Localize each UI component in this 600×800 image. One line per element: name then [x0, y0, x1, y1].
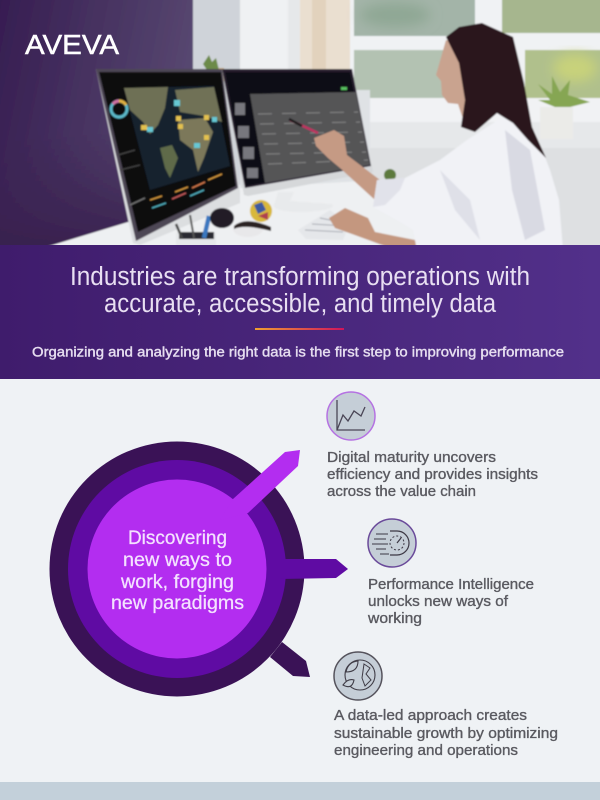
- photo: left monitor with world map: [96, 69, 240, 245]
- title banner: [0, 245, 600, 379]
- item 2 text: Performance Intelligence: [368, 577, 534, 593]
- photo: potted plant on sill: [538, 77, 590, 122]
- item 2 text: unlocks new ways of: [368, 594, 509, 610]
- main heading: Industries are transforming operations with: [70, 263, 530, 291]
- centre circle text: [111, 527, 244, 614]
- photo: purple wall: [0, 0, 194, 250]
- inner circle and upper arrow: [88, 450, 300, 658]
- subheading: Organizing and analyzing the right data is the first step to improving performance: [32, 344, 564, 360]
- item 1 text: across the value chain: [327, 484, 476, 500]
- item 1 text: Digital maturity uncovers: [327, 450, 496, 466]
- centre circle text: Discovering: [128, 527, 227, 549]
- item 3: data-led approach: [334, 652, 558, 759]
- photo: donut chart on screen: [111, 101, 127, 117]
- logo: AVEVA: AVEVA: [25, 29, 119, 60]
- main heading: [70, 263, 530, 318]
- hero photo: analyst at dual monitors: [0, 0, 600, 250]
- centre circle text: work, forging: [120, 571, 234, 593]
- photo: desk: [48, 182, 414, 245]
- photo: small plant behind monitors: [202, 54, 225, 82]
- outer ring and lower arrow: [50, 442, 310, 696]
- centre circle text: new ways to: [123, 549, 232, 571]
- item 1 text: [327, 450, 538, 500]
- item 2: performance intelligence: [367, 519, 534, 627]
- item 2 text: [367, 577, 534, 627]
- item 3 text: engineering and operations: [334, 743, 518, 759]
- concentric circle diagram with arrows: [50, 442, 348, 696]
- item 3 text: sustainable growth by optimizing: [334, 726, 558, 742]
- item 1: digital maturity: [327, 392, 538, 500]
- item 3 text: [334, 708, 558, 759]
- centre circle text: new paradigms: [111, 592, 244, 614]
- heading accent rule: [255, 328, 344, 330]
- item 3 text: A data-led approach creates: [334, 708, 527, 724]
- photo: desk objects: [176, 169, 396, 247]
- item 2 text: working: [367, 611, 422, 627]
- photo: woman: [289, 23, 563, 250]
- item 1 text: efficiency and provides insights: [327, 467, 538, 483]
- icon: line chart: [327, 392, 375, 440]
- footer strip: [0, 782, 600, 800]
- icon: globe with leaves: [334, 652, 382, 700]
- middle ring and centre arrow: [68, 460, 348, 678]
- icon: speedometer: [368, 519, 416, 567]
- photo: right monitor: [221, 68, 372, 196]
- main heading: accurate, accessible, and timely data: [104, 290, 497, 318]
- photo: room and window: [193, 0, 600, 248]
